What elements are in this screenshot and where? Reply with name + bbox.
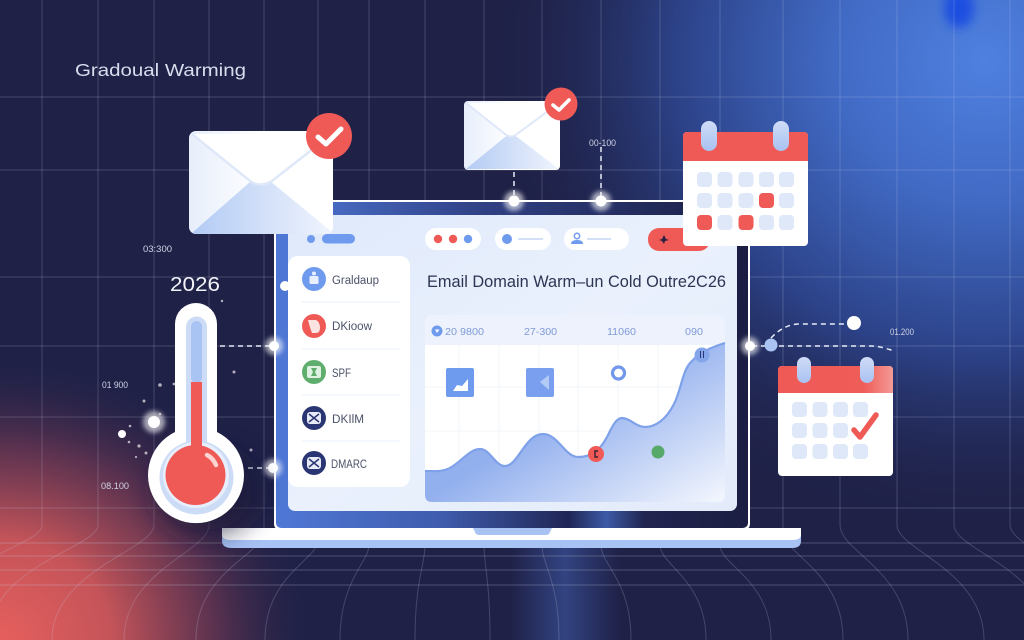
chart marker: ring: [612, 367, 624, 379]
toolbar button: red: [648, 228, 710, 251]
chart plot background: [425, 345, 725, 502]
chart marker: peak point: [694, 348, 710, 362]
small axis labels: 03:300: [143, 244, 172, 254]
sidebar item: Graldaup: Graldaup: [332, 275, 379, 287]
chart header values: [432, 326, 703, 338]
chart card: [425, 315, 725, 502]
toolbar pill: search: [495, 228, 551, 250]
sidebar item: DMARC: DMARC: [331, 459, 367, 471]
chart header values: 11060: [607, 327, 636, 338]
laptop base: [222, 528, 801, 548]
connector dashes: [220, 147, 894, 468]
icon: large envelope with check: [189, 113, 352, 234]
dashboard panel: [288, 215, 737, 511]
chart header values: 090: [685, 327, 703, 338]
small axis labels: 01 900: [102, 380, 128, 390]
sidebar item: DKIM: [302, 406, 364, 430]
small axis labels: 01.200: [890, 327, 914, 337]
toolbar: [307, 228, 710, 251]
icon: small envelope with check: [464, 88, 578, 170]
icon: calendar with check: [778, 357, 893, 476]
sidebar item: SPF: [302, 360, 351, 384]
check badge: [544, 88, 578, 120]
icon: calendar top: [683, 121, 808, 246]
small axis labels: [101, 138, 914, 491]
sidebar item: DKIM: DKIlM: [332, 414, 364, 426]
chart header values: 27-300: [524, 327, 557, 338]
chart marker: red point: [588, 446, 604, 462]
area chart curve: [425, 343, 725, 502]
check badge: [306, 113, 352, 159]
chart marker: green point: [652, 446, 664, 458]
laptop lid and screen: [274, 200, 750, 530]
dashboard title: Email Domain Warm–un Cold Outre2C26: [427, 272, 726, 291]
sidebar item: DKioow: DKioow: [332, 321, 373, 333]
thermometer year label: 2026: [170, 274, 220, 296]
sidebar item: SPF: SPF: [332, 368, 351, 380]
sidebar: [288, 256, 410, 487]
small axis labels: 00-100: [589, 138, 616, 148]
small axis labels: 08.100: [101, 481, 129, 491]
sidebar item: DKioow: [302, 314, 373, 338]
chart icon: arrow square: [526, 368, 554, 397]
toolbar pill: status dots: [425, 228, 481, 250]
glowing nodes: [118, 191, 861, 477]
chart icon: trend square: [446, 368, 474, 397]
chart header values: 20 9800: [445, 327, 484, 338]
heading: Gradual Warming: Gradoual Warming: [75, 60, 246, 80]
laptop: [222, 200, 801, 548]
sidebar item: Graldaup: [302, 267, 379, 291]
icon: thermometer: [148, 303, 260, 538]
sidebar item: DMARC: [302, 451, 367, 475]
toolbar pill: user: [564, 228, 629, 250]
